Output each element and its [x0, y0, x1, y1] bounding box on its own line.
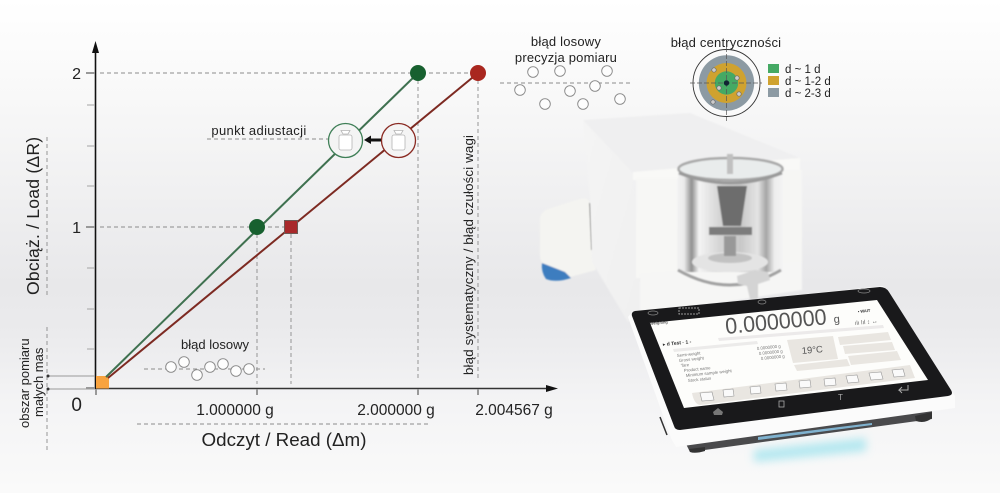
- tablet screen: temperature cards: 19°C: [801, 344, 824, 357]
- y axis labels: Obciąż. / Load (ΔR): [23, 137, 43, 295]
- icon: red weight: [382, 124, 416, 158]
- random error near axis: [166, 337, 254, 380]
- small-mass measuring area: małych mas: [31, 347, 46, 417]
- tablet screen: sample list: Semi-weight: [677, 350, 701, 358]
- tablet screen: sample list: Stock status: [688, 376, 711, 383]
- balance: left module: [540, 198, 596, 281]
- tablet screen: header labels: • WAIT: [858, 308, 871, 314]
- y axis labels: [23, 66, 82, 416]
- tablet screen: sample list: Product name: [684, 365, 711, 373]
- tablet screen: sample list: 0.0000000 g: [761, 353, 785, 361]
- tablet screen: button bar: [692, 365, 915, 405]
- tablet: underside and feet: [686, 410, 932, 452]
- tablet: stand: [660, 417, 667, 435]
- random error / precision: błąd losowy: [531, 34, 601, 49]
- y axis labels: 2: [72, 66, 81, 83]
- tablet screen: weight readout: [718, 304, 884, 341]
- x axis labels: Odczyt / Read (Δm): [202, 429, 366, 450]
- green line: [106, 73, 418, 377]
- red line: [108, 73, 478, 378]
- tablet: blue strip: [758, 423, 872, 440]
- tablet: black bezel: [632, 287, 952, 430]
- tablet: blue glow: [754, 438, 866, 462]
- balance photo: [540, 113, 955, 462]
- small-mass measuring area: obszar pomiaru: [17, 338, 32, 428]
- target diagram: [690, 47, 762, 121]
- centricity error: [671, 35, 831, 121]
- random error / precision: precyzja pomiaru: [515, 50, 617, 65]
- x axis labels: 1.000000 g: [196, 402, 274, 419]
- tablet: white frame: [628, 286, 955, 447]
- tablet screen: sample list: Tare: [681, 362, 690, 368]
- balance: chamber body: [583, 113, 802, 322]
- tablet screen: header labels: Weighing: [650, 319, 668, 326]
- systematic error label: błąd systematyczny / błąd czułości wagi: [461, 135, 476, 375]
- small-mass measuring area: [17, 338, 109, 428]
- legend: [768, 64, 831, 100]
- y axis labels: 0: [71, 395, 82, 416]
- tablet: bezel icons: [648, 289, 908, 415]
- tablet screen: sample list: [673, 341, 785, 383]
- tablet screen: weight readout: 0.0000000: [724, 304, 828, 339]
- centricity error: błąd centryczności: [671, 35, 781, 50]
- adjustment point: punkt adiustacji: [211, 123, 307, 138]
- tablet screen: header labels: [650, 308, 878, 348]
- tablet screen: sample list: 0.0000000 g: [759, 348, 783, 356]
- random error / precision: [515, 34, 625, 109]
- balance: glass draft shield: [678, 154, 783, 299]
- x axis labels: 2.004567 g: [475, 402, 553, 419]
- legend: d ~ 1-2 d: [785, 76, 831, 88]
- tablet screen: sample list: Gross weight: [679, 355, 705, 363]
- guide lines: [47, 73, 630, 450]
- random error near axis: błąd losowy: [181, 337, 249, 352]
- y axis labels: 1: [72, 220, 81, 237]
- x axis labels: 2.000000 g: [357, 402, 435, 419]
- icon: green weight: [328, 124, 362, 158]
- data points: [249, 65, 486, 235]
- arrow: [364, 136, 381, 144]
- tablet screen: sample list: Minimum sample weight: [686, 368, 733, 378]
- axes: [86, 41, 558, 395]
- tablet screen: header labels: ▸ d Test · 1 -: [663, 339, 692, 348]
- tablet screen: weight readout: g: [833, 313, 840, 326]
- adjustment point: [211, 123, 416, 158]
- tablet screen: header labels: ılı lıl ↕ ↔: [855, 319, 878, 327]
- tablet: [628, 286, 955, 453]
- tablet: screen: [650, 300, 928, 408]
- tablet: bezel icons: T: [838, 393, 843, 402]
- legend: d ~ 1 d: [785, 64, 820, 76]
- legend: d ~ 2-3 d: [785, 88, 831, 100]
- tablet screen: sample list: 0.0000000 g: [757, 343, 781, 351]
- x axis labels: [196, 402, 553, 450]
- tablet screen: temperature cards: [787, 332, 901, 371]
